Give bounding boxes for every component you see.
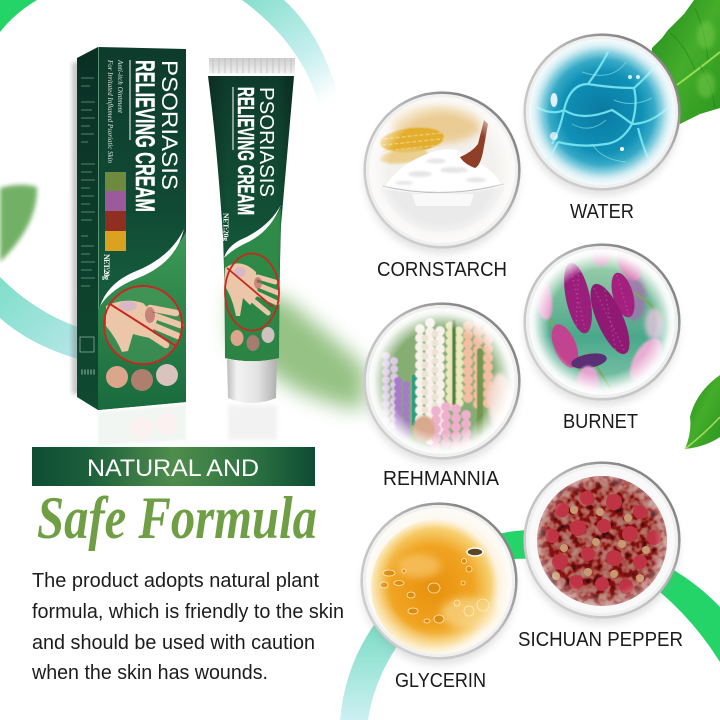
blurred leaf left bbox=[0, 185, 37, 262]
description bbox=[31, 569, 344, 684]
description: The product adopts natural plant bbox=[32, 569, 319, 592]
tube hand illustration bbox=[224, 254, 279, 330]
product tube bbox=[208, 58, 295, 440]
description: formula, which is friendly to the skin bbox=[32, 600, 344, 623]
label: burnet: BURNET bbox=[563, 410, 638, 433]
tube swoosh bbox=[224, 205, 281, 258]
box skin photos bbox=[106, 364, 178, 391]
tube net weight: NET:20g bbox=[222, 213, 230, 241]
box front panel bbox=[98, 47, 186, 410]
white spike bbox=[420, 323, 440, 441]
box side panel bbox=[77, 47, 98, 410]
ingredient: rehmannia bbox=[364, 303, 520, 465]
tube reflection bbox=[228, 405, 277, 440]
cream spike bbox=[450, 326, 459, 409]
box title: PSORIASIS bbox=[157, 60, 182, 190]
box hand illustration bbox=[104, 286, 182, 364]
ingredient: glycerin bbox=[361, 503, 517, 665]
pink lower spike bbox=[436, 407, 466, 449]
tube body bbox=[208, 76, 294, 361]
label: glycerin: GLYCERIN bbox=[395, 669, 486, 692]
top right leaf bbox=[650, 0, 720, 124]
description: and should be used with caution bbox=[32, 631, 315, 654]
product box: For Irritated Inflamed Psoriatic Skin bbox=[106, 59, 115, 163]
product box bbox=[72, 47, 186, 446]
salmon spike bbox=[468, 323, 488, 407]
box small print: Anti-itch Ointment bbox=[116, 59, 125, 114]
box lower wave bbox=[98, 232, 186, 410]
decorative arc: teal left bbox=[0, 277, 78, 359]
label: cornstarch: CORNSTARCH bbox=[377, 258, 507, 281]
label: sichuan pepper: SICHUAN PEPPER bbox=[518, 628, 683, 651]
banner text: NATURAL AND bbox=[87, 455, 259, 482]
description: when the skin has wounds. bbox=[31, 661, 268, 684]
box subtitle: RELIEVING CREAM bbox=[130, 60, 160, 212]
purple spike bbox=[386, 356, 394, 431]
box ingredient thumbnails bbox=[105, 172, 126, 251]
decorative arc: green corner top left bbox=[0, 0, 37, 32]
ingredient: sichuan pepper bbox=[524, 462, 680, 624]
ingredient: cornstarch bbox=[364, 92, 520, 254]
ingredient: water bbox=[524, 34, 680, 196]
tube metal end bbox=[227, 359, 277, 403]
blurred leaf streak middle bbox=[232, 290, 366, 410]
tube lower wave bbox=[224, 208, 281, 361]
right leaf bbox=[685, 375, 720, 449]
script heading: Safe Formula bbox=[37, 485, 317, 551]
box reflection bbox=[98, 404, 186, 446]
box shadow bbox=[72, 62, 81, 394]
box net weight: NET:20g bbox=[102, 254, 111, 280]
decorative arc: teal bottom bbox=[340, 622, 398, 720]
ingredient: burnet bbox=[524, 238, 680, 406]
tube skin photos bbox=[230, 327, 274, 351]
banner bbox=[32, 447, 315, 486]
label: water: WATER bbox=[570, 200, 634, 223]
tube crimp bbox=[209, 58, 295, 74]
decorative arc: teal top bbox=[242, 0, 344, 120]
decorative arc: green lower right bbox=[498, 530, 720, 662]
tube subtitle: RELIEVING CREAM bbox=[233, 87, 259, 215]
label: rehmannia: REHMANNIA bbox=[383, 467, 499, 490]
tube title: PSORIASIS bbox=[255, 87, 278, 197]
box swoosh bbox=[100, 229, 184, 306]
